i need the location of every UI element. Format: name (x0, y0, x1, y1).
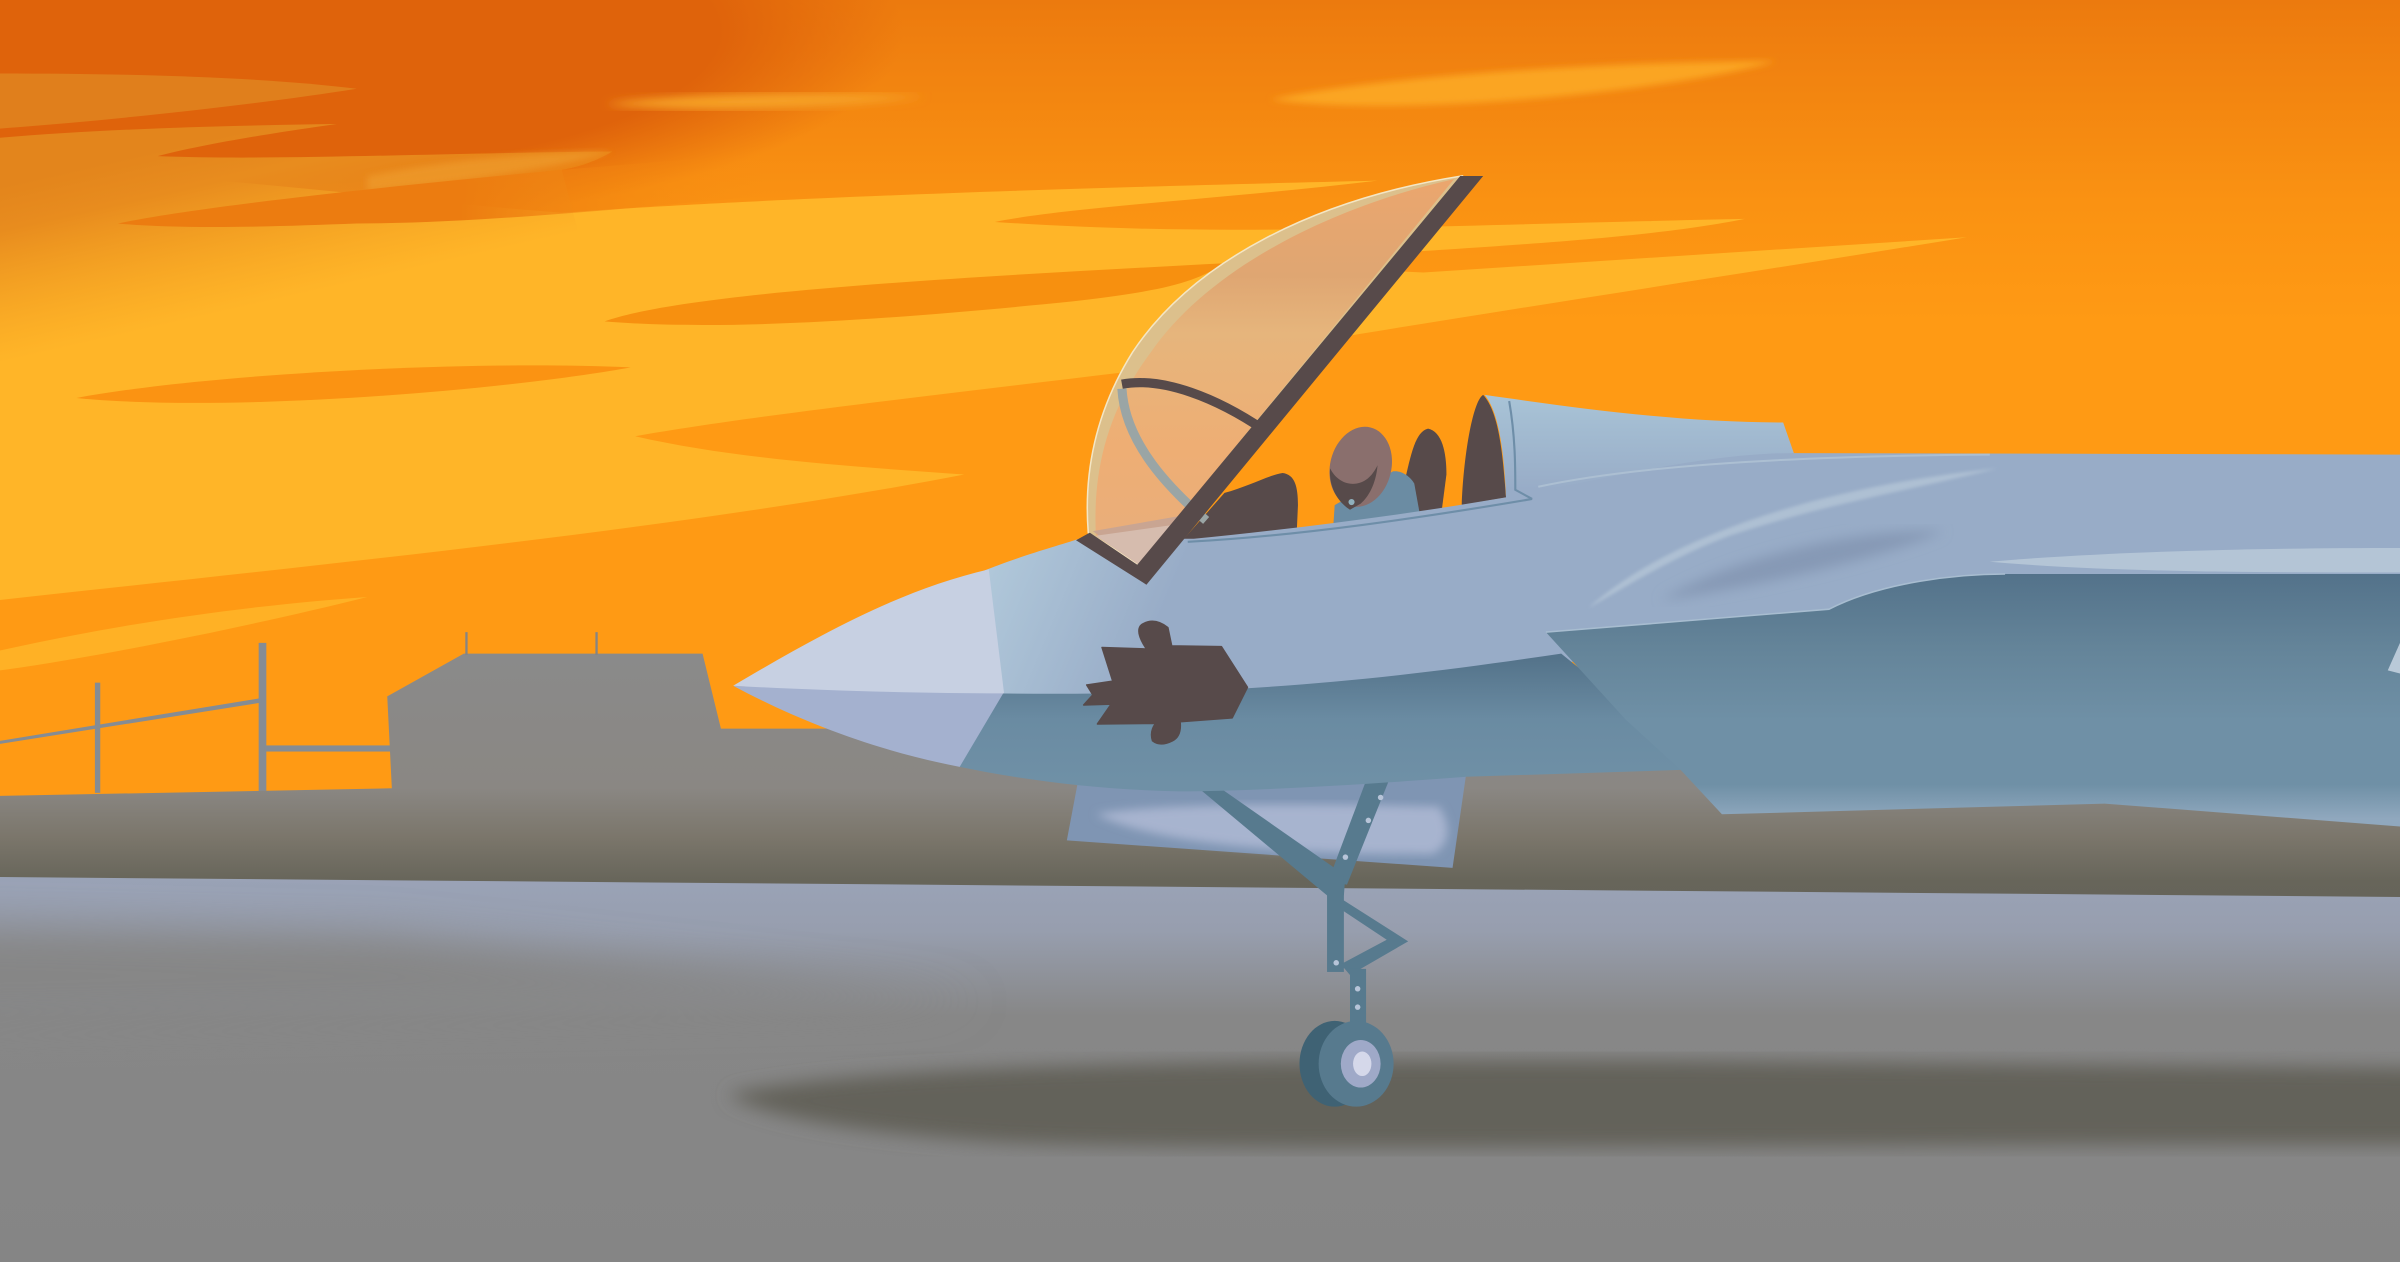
canopy gray arch (1122, 389, 1206, 520)
landing gear door (1067, 773, 1466, 868)
rear canopy hump (1485, 395, 1794, 499)
jet shadow on runway (727, 1060, 2400, 1147)
canopy frame (1076, 176, 1483, 585)
fuselage belly (960, 654, 1699, 791)
sunset cloud streaks (0, 0, 1967, 670)
open canopy (1076, 176, 1483, 585)
pilot helmet (1321, 420, 1400, 514)
dark orange upper left glow (0, 0, 949, 245)
nose cone (733, 569, 1004, 767)
wing and intake (1546, 548, 2400, 827)
cockpit sill (1188, 401, 1532, 542)
upper left mustard field (0, 124, 612, 383)
hangar building and background ground band (0, 654, 2400, 898)
canopy glass (1095, 179, 1454, 565)
cockpit seats and pilot (1179, 395, 1506, 545)
upper left mustard streak (0, 73, 357, 129)
canopy lower reflection (1093, 513, 1198, 565)
canopy rim (1087, 176, 1462, 565)
pilot shoulders (1333, 471, 1420, 528)
dark panel patch on fuselage (1084, 621, 1247, 744)
engine fairing highlight (1538, 455, 1997, 608)
fence and poles (0, 643, 392, 793)
canopy dark arch (1122, 383, 1264, 430)
landing gear struts (1197, 774, 1408, 1030)
orange wedge above yellow (118, 153, 765, 227)
rooftop antennas (465, 632, 598, 655)
nose wheel (1299, 1021, 1394, 1107)
fuselage upper (980, 453, 2400, 701)
rivets (1333, 795, 1383, 1010)
sky background (0, 0, 2400, 811)
runway (0, 877, 2400, 1262)
